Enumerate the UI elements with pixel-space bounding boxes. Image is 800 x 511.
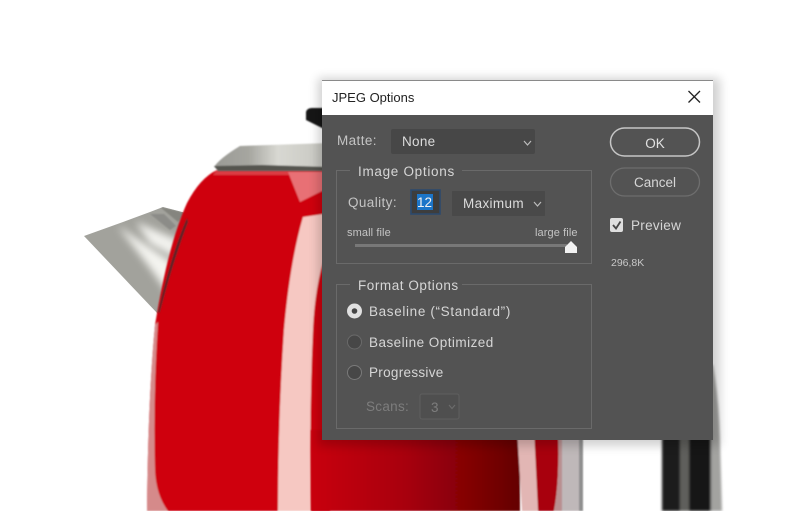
scans select: Scans: <box>366 399 409 414</box>
option: baseline optimized: Baseline Optimized <box>369 335 494 350</box>
dialog: JPEG Options <box>322 80 713 440</box>
file size: 296,8K <box>611 257 644 269</box>
option: progressive: Progressive <box>369 365 444 380</box>
title bar: JPEG Options <box>332 90 415 105</box>
panel: image options: Image Options <box>358 164 455 179</box>
matte row: None <box>402 134 435 149</box>
close icon <box>688 91 700 102</box>
quality input <box>411 190 440 214</box>
preview checkbox: Preview <box>631 218 681 233</box>
cancel button: Cancel <box>634 175 676 190</box>
quality input: 12 <box>417 195 432 210</box>
matte row: Matte: <box>337 133 377 148</box>
panel: image options: large file <box>535 227 578 239</box>
scans select <box>366 394 459 419</box>
kettle base right side <box>311 430 583 511</box>
slider labels: small file <box>347 227 391 239</box>
kettle lid <box>214 143 330 171</box>
kettle knob <box>306 108 330 130</box>
quality preset select: Maximum <box>463 196 524 211</box>
quality slider <box>355 241 577 253</box>
ok button: OK <box>645 136 665 151</box>
panel: image options <box>336 164 592 264</box>
kettle handle <box>662 365 722 511</box>
kettle body <box>147 170 330 511</box>
option: baseline standard: Baseline (“Standard”) <box>369 304 511 319</box>
quality preset select <box>452 191 545 216</box>
title bar <box>322 80 713 115</box>
cancel button <box>610 168 700 196</box>
panel: format options <box>336 278 592 428</box>
dialog panel <box>322 80 713 440</box>
kettle spout <box>84 207 184 314</box>
quality label: Quality: <box>348 195 397 210</box>
matte row <box>337 129 535 154</box>
dialog shadow <box>318 78 720 446</box>
kettle illustration <box>80 108 722 511</box>
scans select: 3 <box>431 400 439 415</box>
ok button <box>610 128 700 156</box>
panel: format options: Format Options <box>358 278 459 293</box>
